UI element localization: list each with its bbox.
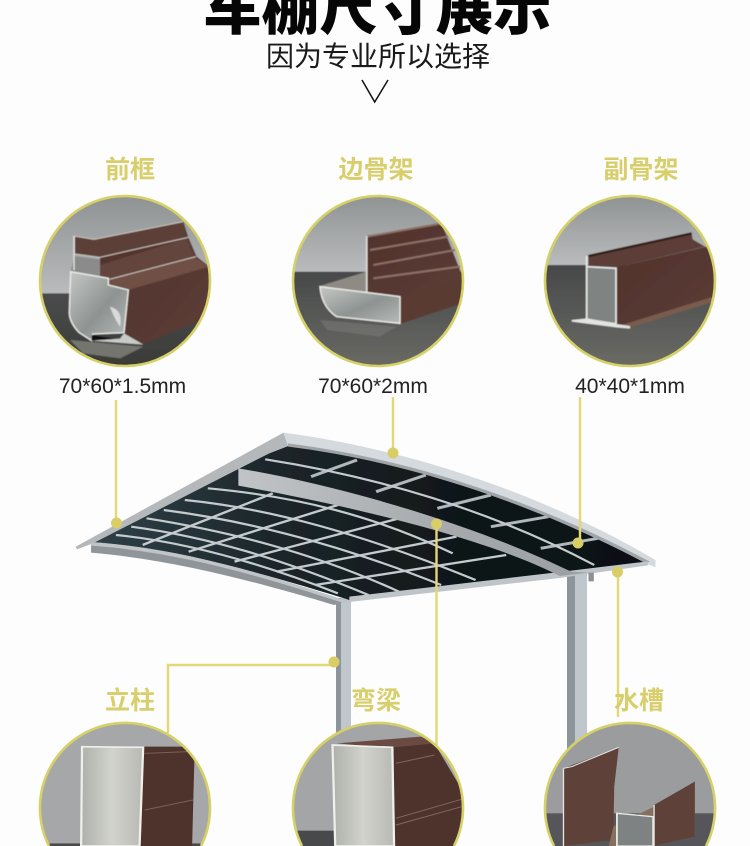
callout: side frame [388, 397, 398, 458]
label: side frame: 边骨架 [338, 156, 414, 184]
callout: front frame [111, 400, 122, 528]
ring: front frame [40, 196, 210, 366]
dimension: sub frame: 40*40*1mm [575, 375, 685, 398]
rear rail [349, 561, 648, 602]
dimension: side frame: 70*60*2mm [318, 375, 428, 398]
ring: post [40, 723, 210, 846]
ring: curved beam [293, 723, 463, 846]
callout: curved beam [431, 518, 442, 745]
roof grid rails [116, 459, 598, 595]
callout: gutter [612, 566, 623, 717]
label: post: 立柱 [105, 687, 155, 715]
icon: down chevron [362, 80, 388, 102]
main curved beam [238, 468, 588, 576]
label: curved beam: 弯梁 [351, 687, 401, 715]
photo circle: post profile [41, 724, 209, 846]
ring: gutter [545, 723, 715, 846]
front curved rail [91, 542, 347, 605]
label: front frame: 前框 [105, 156, 155, 184]
roof glass panels [91, 446, 646, 600]
carport roof [76, 433, 655, 605]
photo circle: front frame profile [37, 193, 213, 370]
callout: sub frame [572, 397, 584, 548]
photo circle: side frame profile [290, 193, 467, 370]
curved side frame [284, 433, 655, 567]
callout: post [168, 656, 340, 733]
photo circle: gutter profile [546, 724, 714, 846]
pillar: left post [336, 598, 351, 738]
pillar: right post [567, 572, 587, 752]
photo circle: curved beam profile [294, 724, 462, 846]
dimension: front frame: 70*60*1.5mm [59, 375, 186, 398]
label: gutter: 水槽 [614, 687, 664, 715]
ring: sub frame [545, 196, 715, 366]
photo circle: sub frame profile [540, 193, 717, 368]
left frame rail [76, 433, 288, 549]
label: sub frame: 副骨架 [603, 156, 679, 184]
ring: side frame [293, 196, 463, 366]
gutter bracket [588, 573, 594, 581]
subtitle: 因为专业所以选择 [266, 41, 490, 72]
